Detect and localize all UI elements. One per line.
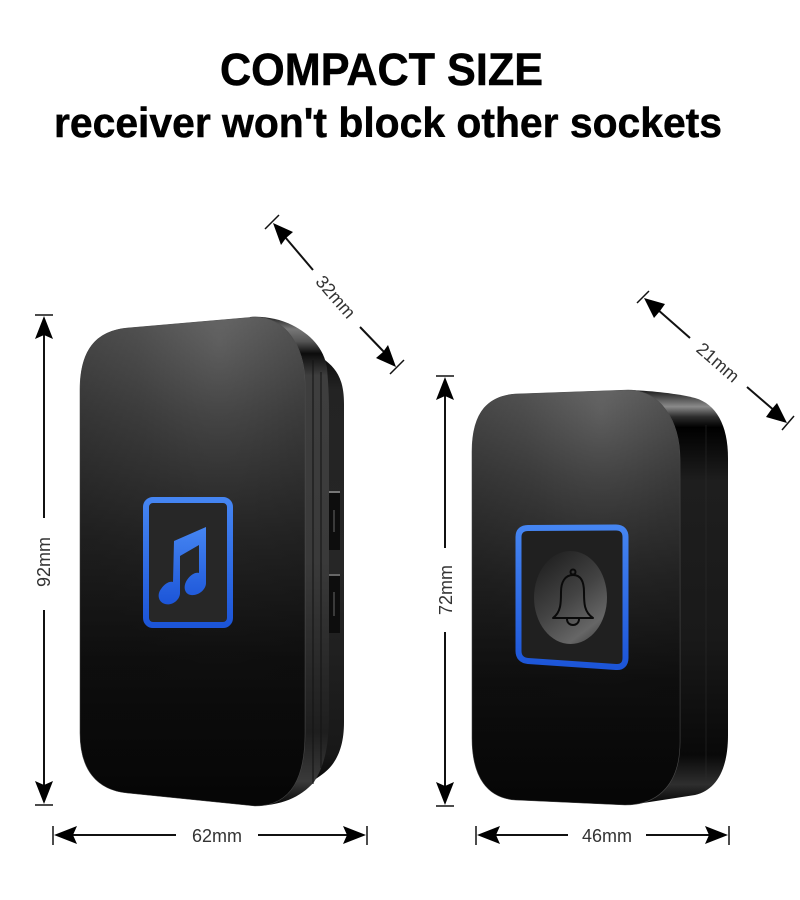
receiver middle band xyxy=(250,317,329,806)
dimension: width 46mm xyxy=(476,826,729,846)
subheading: receiver won't block other sockets xyxy=(54,99,722,146)
bell button oval xyxy=(534,551,607,644)
dimension: width 62mm: 62mm xyxy=(192,826,242,846)
dimension: depth 32mm xyxy=(265,215,404,374)
receiver device xyxy=(80,317,344,806)
dimension: height 72mm xyxy=(436,376,456,806)
title xyxy=(54,44,722,146)
heading: compact size: COMPACT SIZE xyxy=(220,44,543,95)
receiver back housing xyxy=(300,345,344,790)
dimension: width 46mm: 46mm xyxy=(582,826,632,846)
dimension: depth 32mm: 32mm xyxy=(312,272,359,322)
dimension: height 92mm xyxy=(34,315,54,805)
receiver side buttons xyxy=(329,491,340,633)
icon: blue frame with bell button xyxy=(518,528,626,667)
dimension: height 92mm: 92mm xyxy=(34,537,54,587)
dimension: depth 21mm xyxy=(637,291,794,430)
transmitter front face xyxy=(472,390,680,805)
dimension: width 62mm xyxy=(53,826,367,846)
icon: blue frame with music note xyxy=(146,500,230,625)
bell glyph xyxy=(553,570,593,625)
transmitter side housing xyxy=(630,390,728,805)
dimension: height 72mm: 72mm xyxy=(436,565,456,615)
dimension: depth 21mm: 21mm xyxy=(693,339,743,386)
doorbell transmitter device xyxy=(472,390,728,805)
receiver front face xyxy=(80,317,305,806)
